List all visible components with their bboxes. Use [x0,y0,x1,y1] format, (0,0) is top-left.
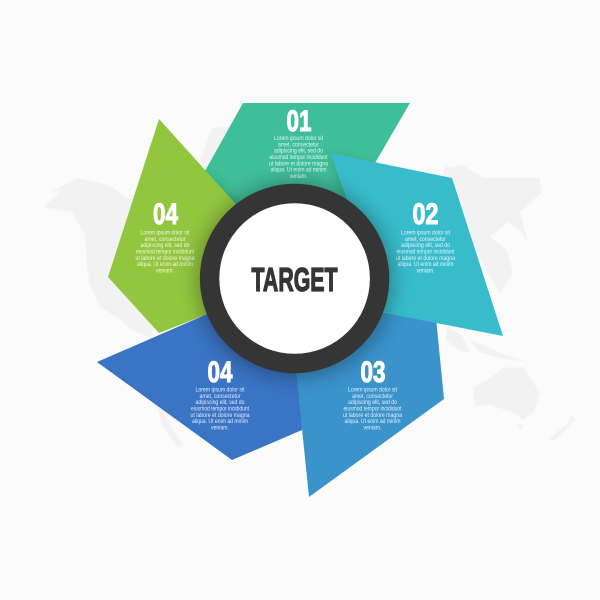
text block: 01: amet, consectetur [278,141,319,148]
text block: 01 [269,135,328,180]
heading: 02: 02 [412,198,438,231]
center target circle [200,184,389,373]
heading: 04 green: 04 [153,198,178,231]
text block: 04 blue: aliqua. Ut enim ad minim [192,418,248,425]
text block: 01: eiusmod tempor incididunt [270,154,328,161]
text block: 01: aliqua. Ut enim ad minim [270,167,326,174]
text block: 01: veniam. [290,173,308,180]
text block: 02 [396,230,455,274]
text block: 04 green: aliqua. Ut enim ad minim [137,261,193,268]
text block: 04 blue: ut labore et dolore magna [190,412,250,419]
panel shadow on teal [210,155,348,204]
center ring shadow [196,181,394,379]
text block: 03: aliqua. Ut enim ad minim [344,418,400,425]
panel: 01 teal [205,103,410,240]
text block: 01: ut labore et dolore magna [269,160,328,167]
text block: 03: Lorem ipsum dolor sit [348,386,397,394]
text block: 03: veniam. [364,424,382,432]
text block: 03: adipiscing elit, sed do [348,399,397,406]
title: TARGET: TARGET [252,261,338,298]
text block: 02: eiusmod tempor incididunt [396,248,455,256]
panel: 04 blue [97,295,302,460]
text block: 03: amet, consectetur [352,393,393,400]
heading: 04 blue: 04 [208,356,233,389]
text block: 02: veniam. [416,268,435,274]
text block: 04 blue [190,386,250,432]
text block: 04 blue: adipiscing elit, sed do [196,399,245,406]
text block: 04 green: veniam. [156,268,174,274]
heading: 03: 03 [360,356,386,389]
text block: 03: ut labore et dolore magna [343,412,402,419]
text block: 04 green: ut labore et dolore magna [136,255,195,262]
text block: 04 green [136,230,195,274]
text block: 04 blue: amet, consectetur [200,393,240,400]
text block: 02: adipiscing elit, sed do [401,242,450,249]
text block: 04 green: adipiscing elit, sed do [140,242,190,249]
world map [43,125,575,448]
text block: 03: eiusmod tempor incididunt [344,406,402,412]
text block: 02: aliqua. Ut enim ad minim [398,261,454,268]
text block: 03 [343,386,402,432]
text block: 04 green: Lorem ipsum dolor sit [140,230,190,236]
text block: 02: Lorem ipsum dolor sit [401,230,450,236]
text block: 01: adipiscing elit, sed do [274,148,323,155]
heading: 01: 01 [286,105,312,138]
text block: 04 green: eiusmod tempor incididunt [136,248,194,256]
panel: 02 cyan [320,153,503,336]
panel: 04 green [108,119,270,333]
text block: 02: ut labore et dolore magna [396,255,455,262]
text block: 04 blue: Lorem ipsum dolor sit [196,386,245,394]
text block: 02: amet, consectetur [405,236,446,243]
panel: 03 blue [294,290,444,497]
text block: 04 blue: veniam. [211,424,229,432]
text block: 04 green: amet, consectetur [144,236,186,243]
text block: 04 blue: eiusmod tempor incididunt [191,406,249,412]
text block: 01: Lorem ipsum dolor sit [274,135,323,142]
